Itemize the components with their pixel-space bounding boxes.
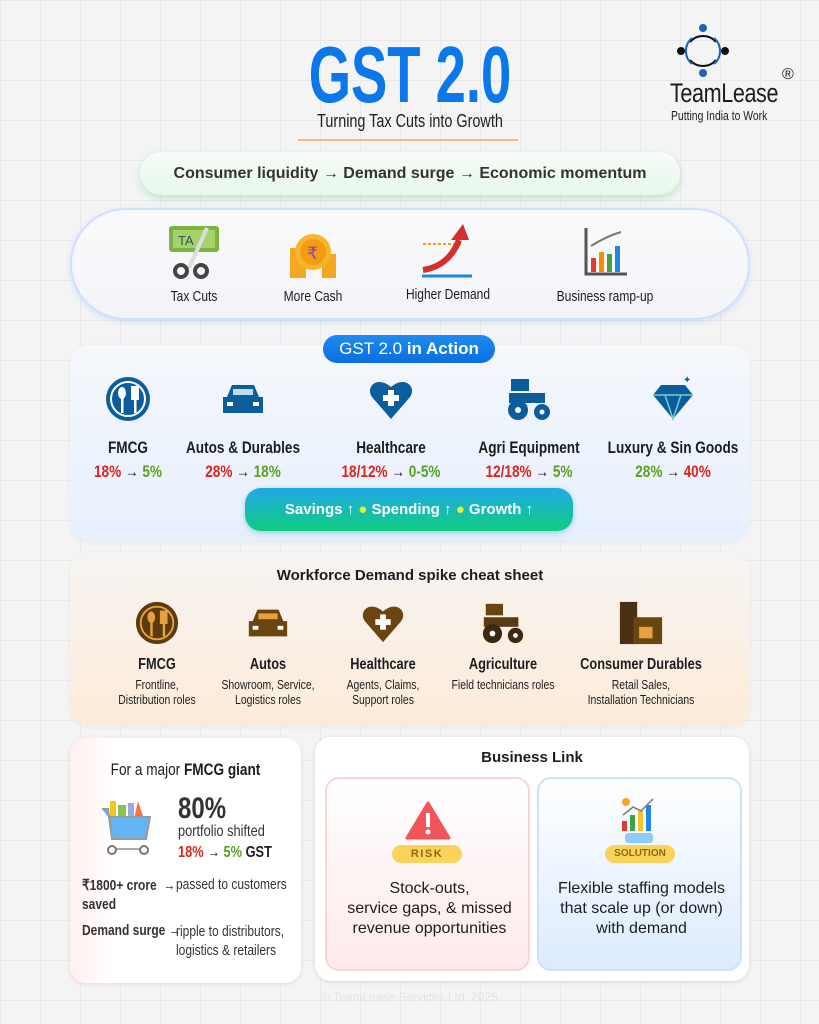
panel: GST 2.0 in Action [70, 345, 750, 541]
Consumer Durables roles [580, 602, 702, 707]
growth pill [245, 488, 573, 531]
Autos & Durables: 28% → 18% [205, 462, 281, 481]
footer: © TeamLease Services Ltd. 2025 [321, 990, 498, 1004]
Agriculture roles: Agriculture [469, 656, 537, 673]
Autos roles: Autos [250, 656, 286, 673]
stat: 80%: 80% [178, 792, 226, 825]
Luxury & Sin Goods: Luxury & Sin Goods [608, 438, 738, 457]
icon: cart [102, 801, 152, 855]
Autos roles: Logistics roles [235, 692, 301, 707]
stat: 1800 crore [82, 877, 175, 913]
subtitle: Turning Tax Cuts into Growth [317, 111, 503, 131]
Healthcare roles: Support roles [352, 692, 414, 707]
Consumer Durables roles: Installation Technicians [588, 692, 694, 707]
Consumer Durables roles: Retail Sales, [612, 677, 670, 692]
logo: TeamLease: TeamLease [670, 78, 778, 108]
growth pill: Savings ↑ ● Spending ↑ ● Growth ↑ [285, 501, 533, 518]
risk box [325, 777, 530, 971]
Agri Equipment: 12/18% → 5% [486, 462, 572, 481]
orange underline [298, 139, 518, 141]
risk box: Stock-outs, [389, 880, 470, 897]
Autos & Durables: Autos & Durables [186, 438, 300, 457]
panel: tax cut chain [70, 208, 750, 320]
heading: Workforce Demand spike cheat sheet [277, 567, 543, 584]
Healthcare roles [346, 606, 419, 707]
Agri Equipment: Agri Equipment [478, 438, 580, 457]
logo: TeamLease [670, 24, 794, 123]
card: FMCG giant: passed to customers [176, 876, 287, 893]
card: FMCG giant: 18% → 5% GST [178, 844, 272, 861]
risk box: RISK [411, 848, 443, 860]
Luxury & Sin Goods [608, 375, 738, 481]
badge: GST 2.0 in Action [323, 335, 495, 363]
Healthcare: Healthcare [356, 438, 426, 457]
icon: higher demand [406, 224, 490, 303]
Autos & Durables [186, 385, 300, 481]
heading: For a major FMCG giant [111, 760, 260, 779]
green pill: flow [140, 152, 680, 195]
solution box: with demand [596, 920, 687, 937]
badge: GST 2.0 in Action: GST 2.0 in Action [339, 339, 479, 358]
Consumer Durables roles: Consumer Durables [580, 656, 702, 673]
icon: more cash: ₹ [307, 244, 318, 264]
Healthcare: 18/12% → 0-5% [341, 462, 441, 481]
Autos roles [221, 610, 315, 707]
Agriculture roles: Field technicians roles [452, 677, 554, 692]
FMCG roles: FMCG [138, 656, 176, 673]
Luxury & Sin Goods: 28% → 40% [635, 462, 711, 481]
stat: 1800 crore: saved [82, 896, 116, 913]
stat: 1800 crore: ₹1800+ crore → [82, 877, 175, 894]
Agri Equipment [478, 379, 580, 481]
card: FMCG giant [70, 738, 301, 983]
panel: Workforce demand [70, 552, 750, 726]
FMCG: FMCG [108, 438, 148, 457]
Autos roles: Showroom, Service, [221, 677, 315, 692]
FMCG roles [118, 602, 196, 707]
card: FMCG giant: logistics & retailers [176, 942, 276, 959]
icon: tax cuts: TA [178, 233, 194, 248]
icon: more cash: More Cash [284, 288, 342, 305]
icon: more cash [284, 234, 342, 305]
heading: Business Link [481, 749, 583, 766]
solution box [537, 777, 742, 971]
solution box: SOLUTION [614, 848, 666, 859]
icon: tax cuts [169, 226, 219, 305]
Luxury & Sin Goods: ✦ [683, 375, 691, 386]
solution box: Flexible staffing models [558, 880, 725, 897]
icon: business ramp-up: Business ramp-up [557, 288, 653, 305]
stat: demand surge: Demand surge → [82, 922, 181, 939]
icon: tax cuts: Tax Cuts [171, 288, 217, 305]
card: FMCG giant: ripple to distributors, [176, 923, 284, 940]
FMCG roles: Distribution roles [118, 692, 196, 707]
risk box: revenue opportunities [353, 920, 506, 937]
logo: TeamLease: Putting India to Work [671, 108, 767, 123]
card: Business Link [315, 737, 749, 981]
risk box: service gaps, & missed [347, 900, 512, 917]
Healthcare roles: Healthcare [350, 656, 416, 673]
icon: higher demand: Higher Demand [406, 286, 490, 303]
Agriculture roles [452, 604, 554, 692]
FMCG roles: Frontline, [135, 677, 179, 692]
title: GST 2.0 [309, 30, 511, 119]
FMCG: 18% → 5% [94, 462, 162, 481]
solution box: that scale up (or down) [560, 900, 723, 917]
logo: TeamLease: ® [782, 66, 794, 83]
green pill: flow: Consumer liquidity → Demand surge → Economic momentum [174, 165, 646, 182]
icon: business ramp-up [557, 228, 653, 305]
Healthcare roles: Agents, Claims, [347, 677, 419, 692]
FMCG [94, 377, 162, 481]
card: FMCG giant: portfolio shifted [178, 823, 265, 840]
Healthcare [341, 382, 441, 481]
